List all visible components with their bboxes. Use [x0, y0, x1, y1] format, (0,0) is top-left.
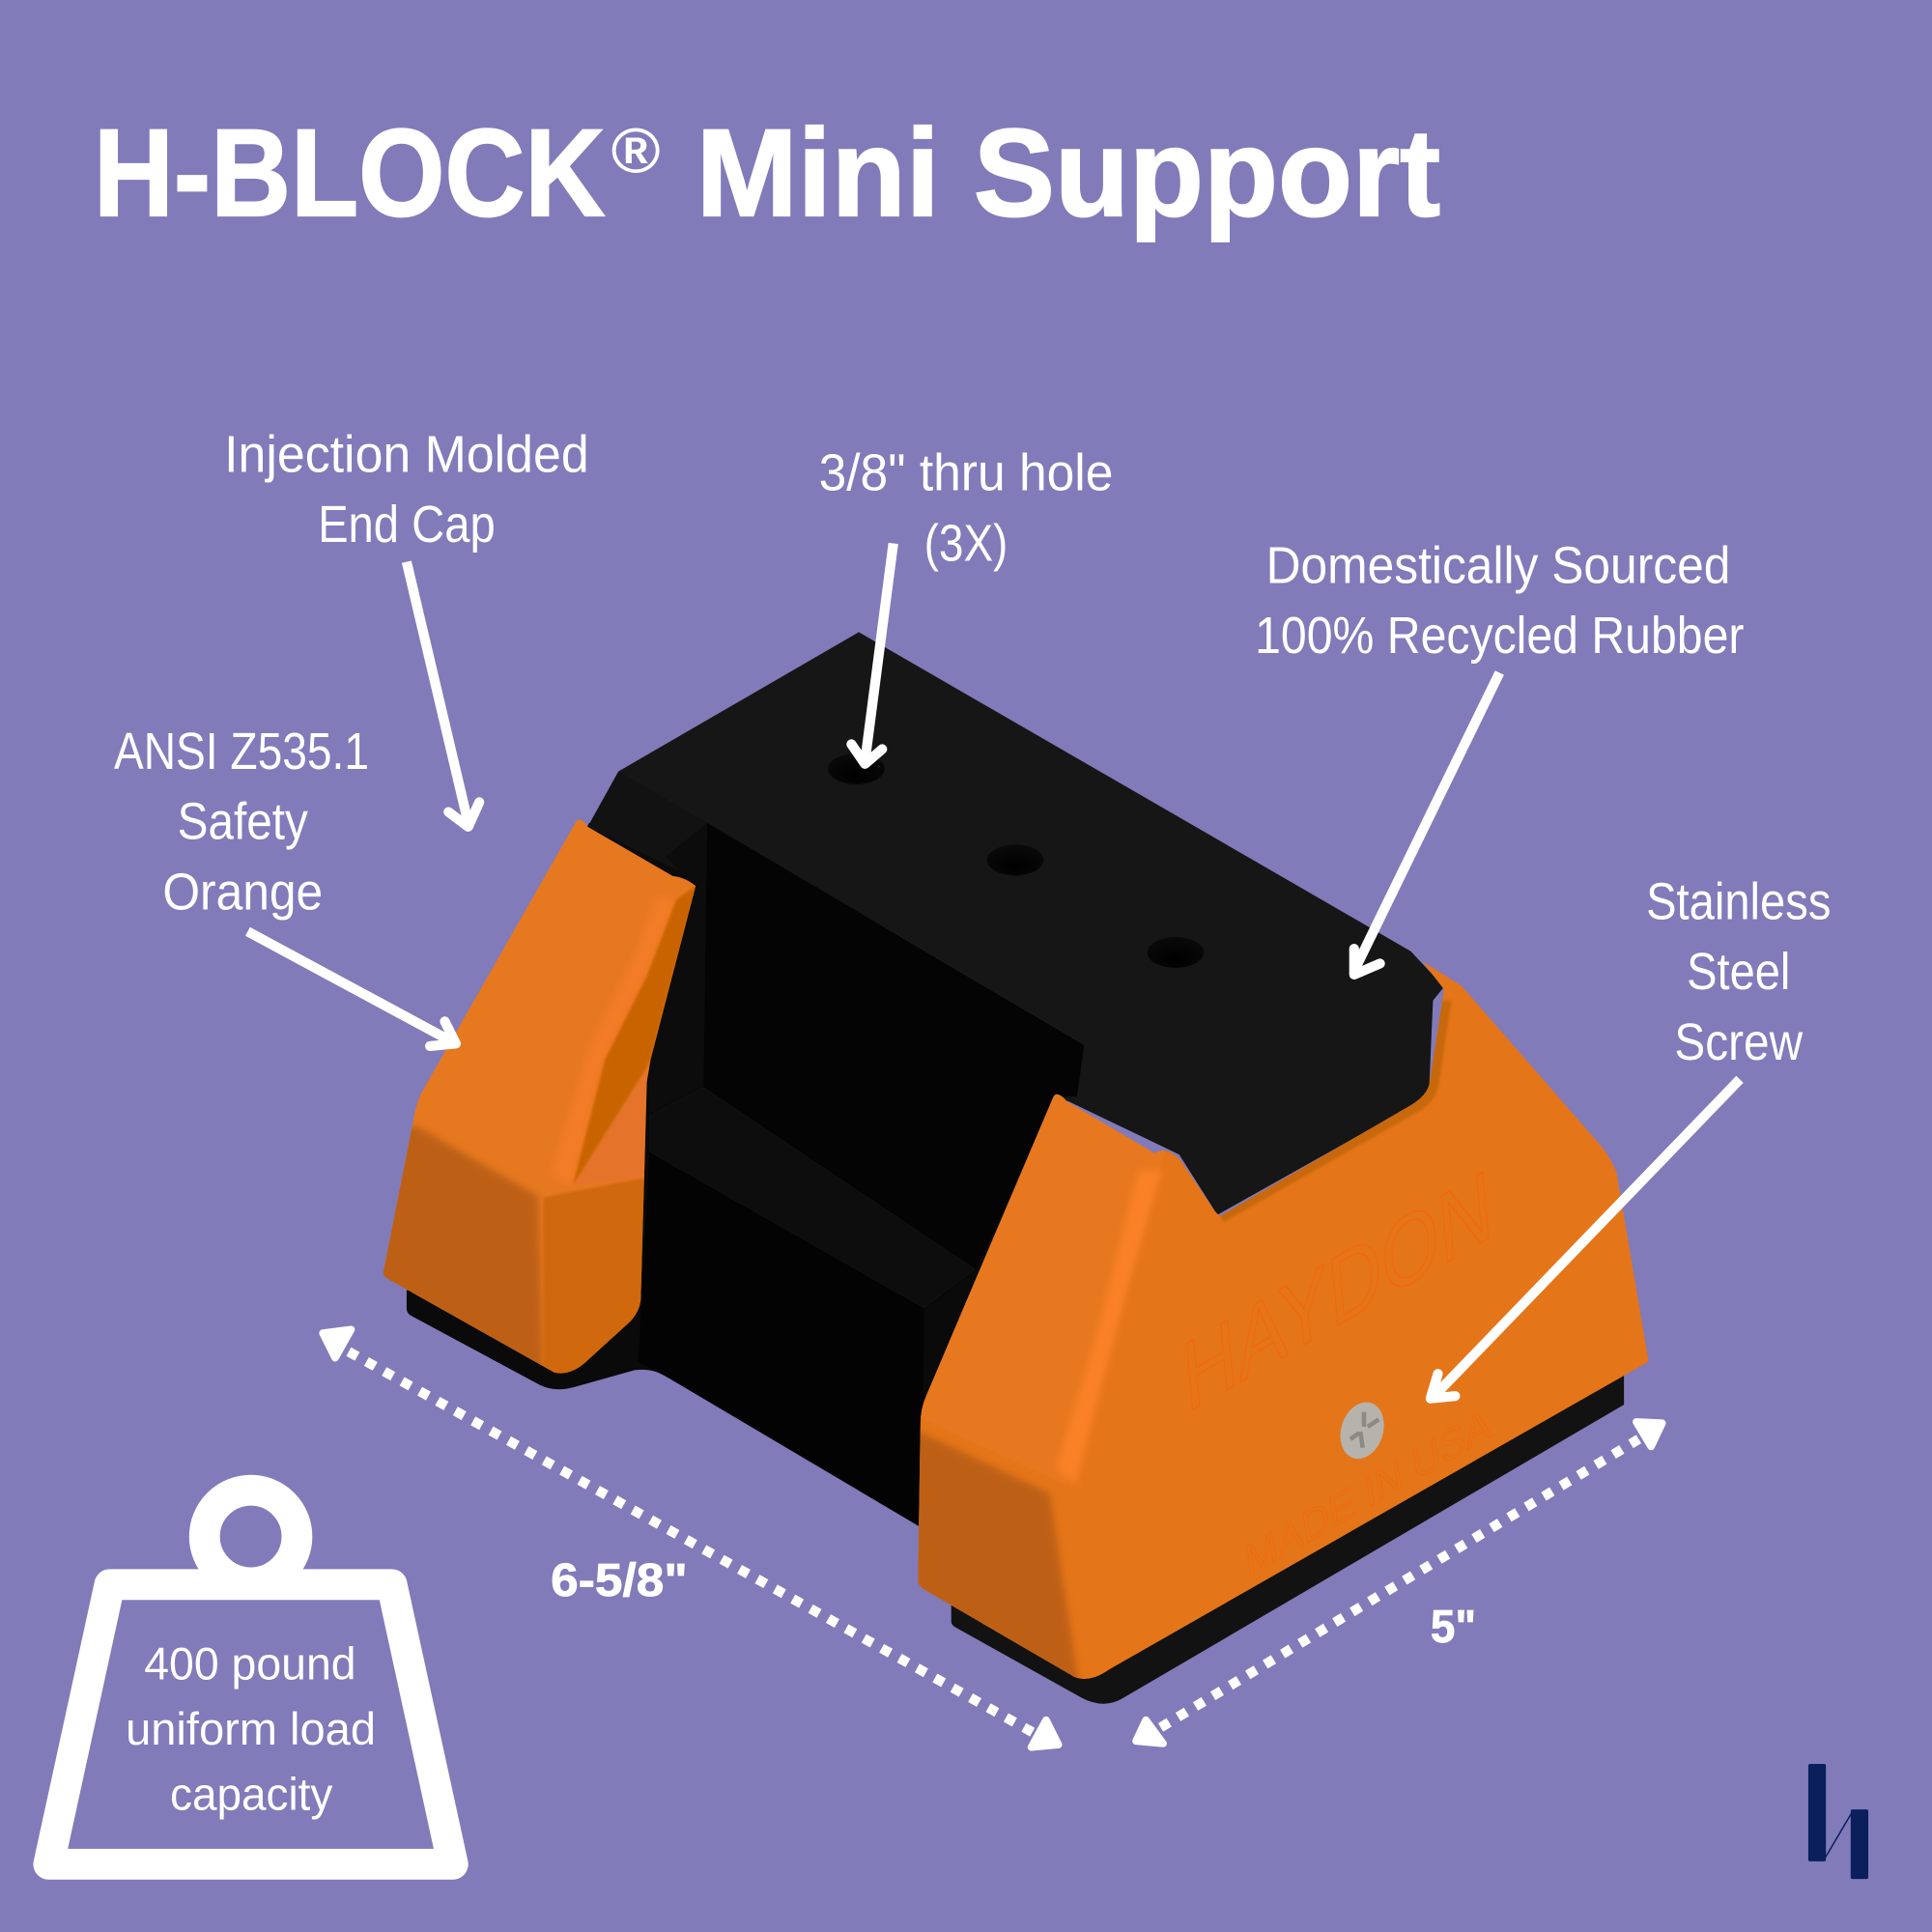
label: stainless steel screw: Screw	[1674, 1014, 1803, 1071]
end cap side shadow	[587, 771, 707, 870]
arrow: end cap	[407, 562, 479, 827]
arrow: safety orange	[247, 931, 456, 1046]
right cap recess shadow	[1217, 1001, 1452, 1222]
label: recycled rubber: Domestically Sourced	[1266, 537, 1730, 594]
label: injection molded end cap: Injection Molded	[224, 427, 589, 484]
top face with holes	[587, 632, 1444, 1215]
dimension label: 5 inch: 5"	[1431, 1601, 1476, 1653]
arrow: rubber	[1354, 672, 1499, 975]
label: injection molded end cap: End Cap	[318, 497, 496, 554]
screw	[1333, 1397, 1391, 1464]
label: safety orange: Safety	[178, 794, 308, 851]
arrow: screw	[1431, 1079, 1740, 1399]
left cap highlight ridge	[551, 895, 676, 1185]
load capacity text: capacity	[170, 1770, 333, 1821]
title: ®	[611, 116, 661, 187]
label: stainless steel screw	[1646, 874, 1831, 1071]
right cap upper left face	[921, 1094, 1165, 1418]
hole 1	[828, 753, 885, 784]
load capacity text: uniform load	[126, 1704, 376, 1755]
cavity back wall	[703, 823, 1084, 1269]
left rubber pad and body	[407, 823, 1084, 1528]
product: rubber block with orange end caps	[370, 632, 1663, 1704]
right cap highlight ridge	[1056, 1171, 1162, 1485]
weight icon	[48, 1491, 453, 1864]
right end cap	[912, 955, 1663, 1694]
load capacity text	[126, 1639, 376, 1821]
label: stainless steel screw: Steel	[1687, 944, 1790, 1001]
left end cap	[383, 819, 696, 1374]
label: thru hole: (3X)	[924, 515, 1008, 572]
label: injection molded end cap	[224, 427, 589, 554]
label: safety orange	[114, 724, 369, 921]
right cap dark face	[912, 1423, 1079, 1688]
left cap dark face	[383, 1122, 544, 1367]
label: recycled rubber: 100% Recycled Rubber	[1255, 608, 1744, 665]
label: thru hole	[819, 445, 1113, 572]
dimension arrow: width	[1136, 1422, 1662, 1744]
label: recycled rubber	[1255, 537, 1744, 665]
hole 3	[1148, 937, 1204, 968]
label: thru hole: 3/8" thru hole	[819, 445, 1113, 502]
left cap light triangle	[573, 1067, 647, 1185]
dimension label: 6-5/8 inch: 6-5/8"	[551, 1554, 688, 1606]
logo	[1808, 1764, 1868, 1879]
hole 2	[987, 844, 1043, 875]
cavity frame	[649, 823, 708, 1152]
title: Mini Support	[696, 103, 1440, 242]
label: stainless steel screw: Stainless	[1646, 874, 1831, 931]
inner lower wall	[639, 1152, 924, 1528]
right rubber pad	[952, 1370, 1624, 1704]
embossed HAYDON: HAYDON	[1179, 1148, 1496, 1434]
inner ledge	[649, 1087, 976, 1309]
load capacity text: 400 pound	[144, 1639, 356, 1690]
title	[94, 103, 1440, 242]
title: H-BLOCK	[94, 103, 605, 242]
label: safety orange: Orange	[162, 864, 323, 921]
embossed MADE IN USA: MADE IN USA	[1242, 1397, 1494, 1586]
label: safety orange: ANSI Z535.1	[114, 724, 369, 781]
left cap lower right facet	[543, 1179, 644, 1374]
arrow: thru hole	[851, 543, 894, 764]
dimension arrow: length	[323, 1329, 1059, 1747]
left cap inner shade	[573, 885, 697, 1185]
